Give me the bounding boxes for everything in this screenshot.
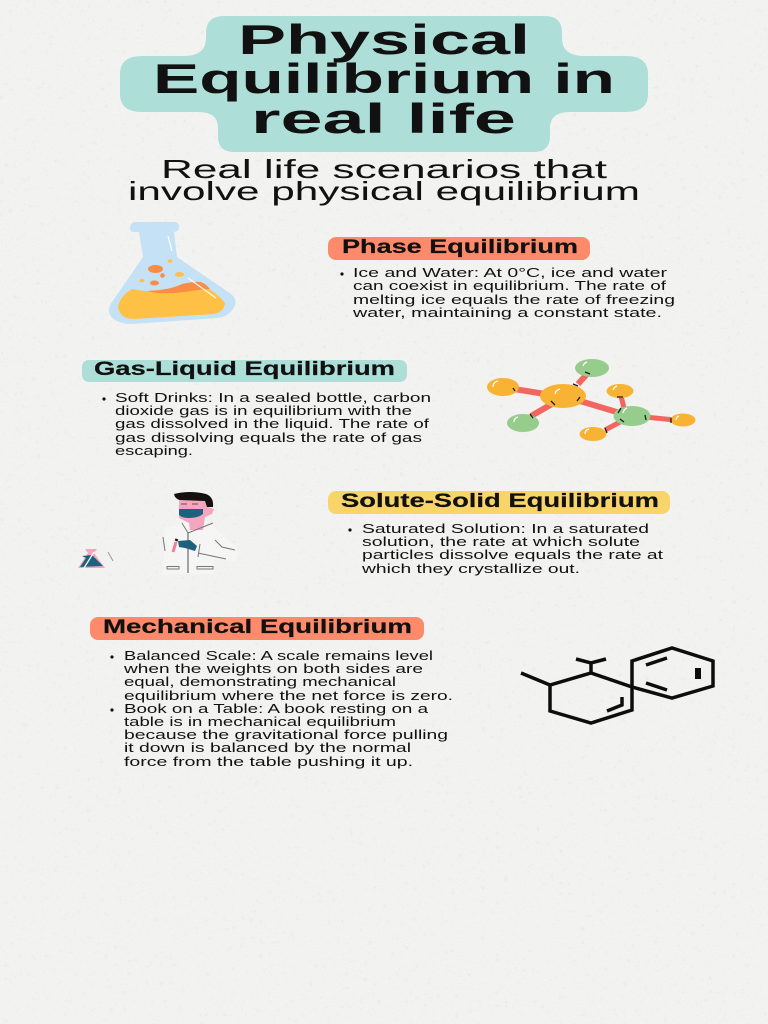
panel: gas-liquid equilibrium [82,359,431,458]
text block: mechanical equilibrium: when the weights on both sides are [123,661,423,676]
text block: mechanical equilibrium: force from the table pushing it up. [124,754,413,769]
text block: solute-solid equilibrium: which they crystallize out. [361,561,580,576]
title text: Physical [238,16,530,63]
text block: phase equilibrium: can coexist in equilibrium. The rate of [353,278,667,293]
title [120,16,648,152]
text block: solute-solid equilibrium [348,521,664,576]
icon: molecule [487,359,696,441]
title text: real life [251,95,516,142]
text block: phase equilibrium: melting ice equals the rate of freezing [353,292,675,307]
icon: conical flask [109,222,236,324]
subtitle: involve physical equilibrium [128,176,640,206]
heading pill: gas-liquid equilibrium: Gas-Liquid Equilibrium [94,359,395,380]
heading pill: phase equilibrium: Phase Equilibrium [342,237,578,258]
text block: gas-liquid equilibrium: gas dissolved in the liquid. The rate of [115,416,430,431]
molecule joints [513,372,671,433]
subtitle: Real life scenarios that [161,154,608,184]
scientist coat [163,522,238,574]
text block: phase equilibrium: water, maintaining a constant state. [351,305,662,320]
text block: mechanical equilibrium: because the gravitational force pulling [124,727,448,742]
text block: mechanical equilibrium: equilibrium where the net force is zero. [124,688,453,703]
title background shape [120,16,648,152]
text block: mechanical equilibrium [110,648,453,769]
heading pill: phase equilibrium [328,237,590,260]
text block: mechanical equilibrium: Book on a Table: A book resting on a [124,701,429,716]
text block: solute-solid equilibrium: Saturated Solution: In a saturated [362,521,649,536]
text block: mechanical equilibrium: equal, demonstrating mechanical [124,674,396,689]
text block: gas-liquid equilibrium [102,390,431,458]
heading pill: solute-solid equilibrium [328,491,670,514]
small flask [78,549,113,568]
illustration: scientist with mask and small flask [78,492,238,574]
panel: mechanical equilibrium [90,617,453,769]
panel: phase equilibrium [328,237,675,320]
scientist hand with test tube [173,539,197,552]
text block: gas-liquid equilibrium: escaping. [115,443,193,458]
text block: mechanical equilibrium: it down is balanced by the normal [124,740,411,755]
heading pill: solute-solid equilibrium: Solute-Solid Equilibrium [341,491,659,512]
text block: gas-liquid equilibrium: gas dissolving equals the rate of gas [115,430,423,445]
panel: solute-solid equilibrium [328,491,670,576]
heading pill: mechanical equilibrium [90,617,424,640]
text block: mechanical equilibrium: Balanced Scale: A scale remains level [124,648,433,663]
text block: phase equilibrium [340,265,675,320]
text block: solute-solid equilibrium: solution, the rate at which solute [362,534,640,549]
text block: gas-liquid equilibrium: Soft Drinks: In a sealed bottle, carbon [115,390,431,405]
text block: mechanical equilibrium: table is in mechanical equilibrium [124,714,396,729]
title text: Equilibrium in [153,55,615,102]
scientist coat details [163,523,235,573]
heading pill: mechanical equilibrium: Mechanical Equilibrium [103,617,412,638]
text block: gas-liquid equilibrium: dioxide gas is in equilibrium with the [115,403,412,418]
scientist head [174,492,214,530]
heading pill: gas-liquid equilibrium [82,359,407,382]
text block: solute-solid equilibrium: particles dissolve equals the rate at [362,547,664,562]
title text [153,16,615,142]
icon: chemical structure [521,648,713,723]
subtitle [128,154,640,206]
text block: phase equilibrium: Ice and Water: At 0°C, ice and water [353,265,668,280]
